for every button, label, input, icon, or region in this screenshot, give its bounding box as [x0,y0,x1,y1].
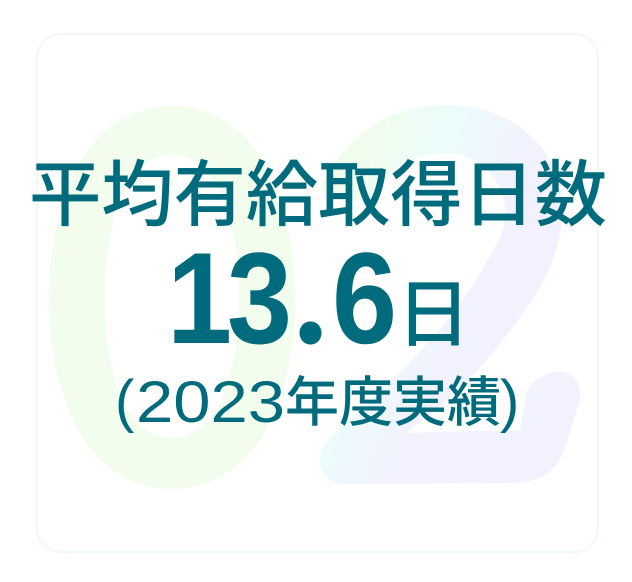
digit 3: 3 [227,226,292,371]
background numeral 2 [320,105,580,484]
year: 2023 [136,370,285,435]
opening parenthesis: ( [115,369,134,434]
panel: card [37,34,598,552]
value: 13.6 days [167,204,470,378]
digit 1: 1 [167,226,232,371]
unit: 日 [396,255,470,362]
digit 6: 6 [332,226,397,371]
note: fiscal 2023 actual [115,358,519,437]
fiscal year label: 年度実績 [285,358,501,437]
heading: average paid leave days: 平均有給取得日数 [29,136,607,241]
closing parenthesis: ) [500,369,519,434]
decimal point: . [291,204,330,378]
background numeral 0 [49,106,295,489]
